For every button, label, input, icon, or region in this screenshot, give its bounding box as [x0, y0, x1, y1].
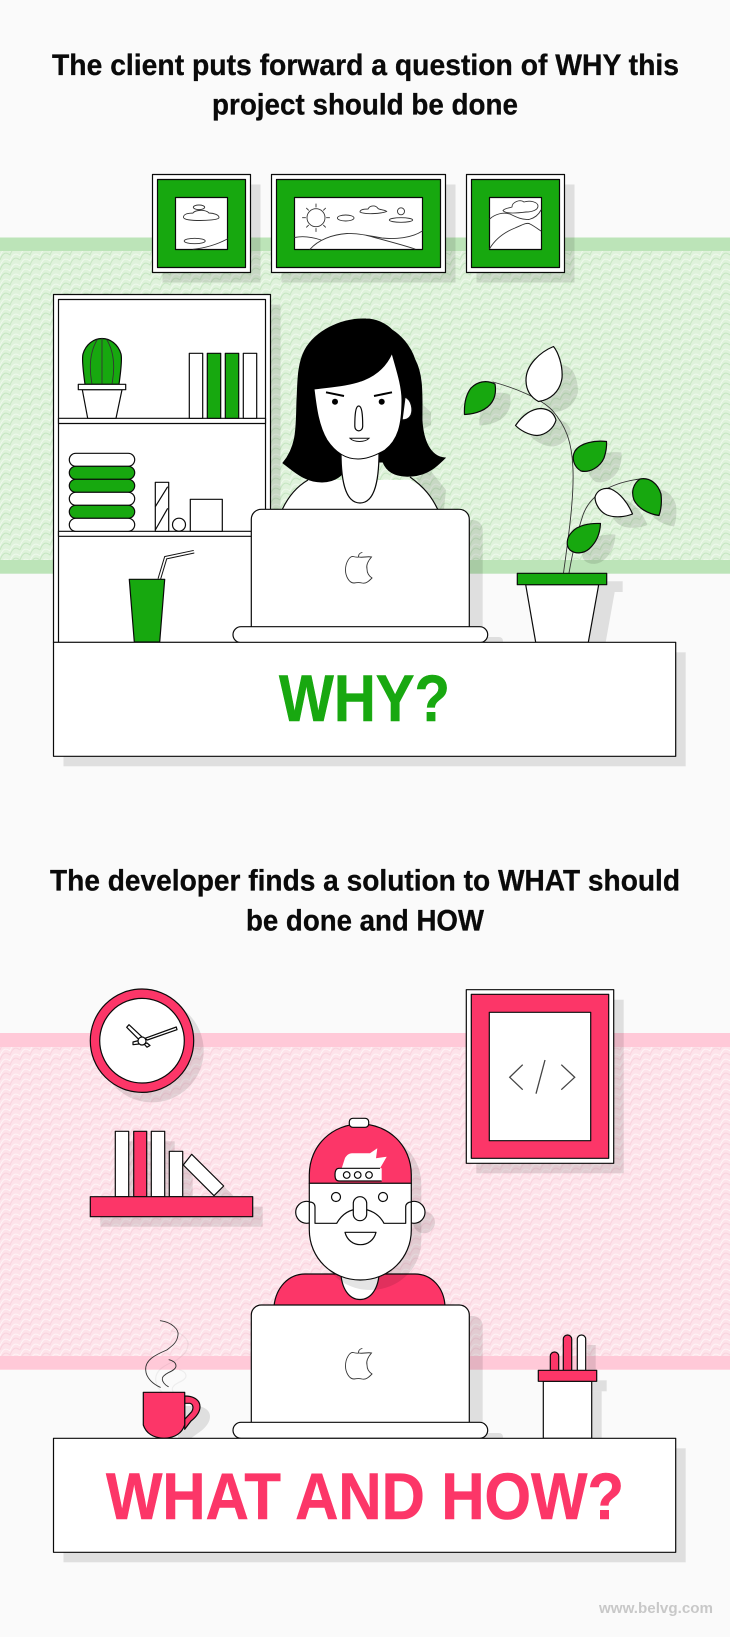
- steam: [146, 1321, 178, 1387]
- mug shadow: [178, 1406, 210, 1439]
- cap button: [349, 1118, 369, 1127]
- shoulder lines: [282, 477, 438, 510]
- icon: apple logo: [346, 1348, 372, 1379]
- laptop base: [233, 627, 488, 643]
- pot rim: [517, 573, 607, 585]
- heading: developer solution: [50, 865, 680, 937]
- face: [309, 1183, 411, 1280]
- label: WHAT AND HOW?: WHAT AND HOW?: [106, 1459, 624, 1533]
- heading: client question: project should be done: [212, 88, 518, 122]
- picture frame: clouds: [152, 174, 260, 282]
- stems: [493, 382, 573, 573]
- cap hair emblem: [335, 1148, 387, 1181]
- woman: [282, 319, 446, 510]
- torso: [282, 480, 438, 510]
- hair: [283, 319, 445, 482]
- mouth: [345, 1232, 376, 1245]
- ears: [296, 1201, 318, 1223]
- wall clock: [90, 989, 204, 1102]
- pencil cup: [538, 1335, 607, 1438]
- desk with WHAT AND HOW label: [54, 1438, 686, 1562]
- wall shelf with books: [90, 1131, 263, 1227]
- neck: [341, 1270, 379, 1300]
- potted plant: [464, 346, 676, 650]
- books upright: [189, 353, 257, 418]
- plant shadows: [479, 362, 676, 650]
- picture frame: sun and hills: [272, 174, 456, 282]
- code icon: [510, 1060, 575, 1094]
- heading: client question: The client puts forward a question of WHY this: [52, 49, 679, 82]
- bookshelf: [54, 294, 280, 644]
- cup body: [543, 1381, 592, 1438]
- developer: [274, 1118, 445, 1306]
- hair shadow: [416, 405, 446, 509]
- neck: [341, 452, 379, 503]
- laptop base: [233, 1422, 488, 1438]
- shoulders: [274, 1274, 445, 1306]
- mug handle: [185, 1396, 200, 1429]
- wall: pink patterned wall with bands: [0, 1033, 730, 1370]
- picture frame: code symbol: [466, 990, 624, 1173]
- eyes: [332, 1192, 388, 1202]
- nose: [353, 1197, 367, 1221]
- pencils: [550, 1352, 559, 1371]
- glass with straw: [129, 552, 194, 642]
- heading: client question: [52, 49, 679, 122]
- leaves: [464, 346, 661, 553]
- icon: apple logo: [346, 552, 372, 583]
- label: WHY?: WHY?: [279, 661, 450, 735]
- face: [314, 353, 402, 459]
- head shadow: [319, 1134, 435, 1290]
- desk with WHY label: [54, 642, 686, 766]
- nose: [355, 406, 363, 431]
- eyebrows and eyes: [326, 392, 392, 405]
- shelf ornaments: [155, 482, 222, 531]
- coffee mug with steam: [143, 1321, 210, 1439]
- stack of towels: [69, 453, 135, 531]
- mouth: [350, 438, 369, 441]
- laptop: client: [233, 509, 503, 645]
- wall: green patterned wall with bands: [0, 238, 730, 574]
- cup rim: [538, 1370, 597, 1381]
- ear: [402, 397, 412, 420]
- heading: developer solution: The developer finds a solution to WHAT should: [50, 865, 680, 898]
- steam shadow: [156, 1331, 188, 1397]
- mug body: [143, 1392, 185, 1438]
- flower pot: [526, 585, 599, 642]
- laptop: developer: [233, 1305, 503, 1441]
- beard outline: [309, 1202, 411, 1223]
- heading: developer solution: be done and HOW: [246, 904, 485, 937]
- icon: cactus in pot: [78, 338, 126, 418]
- picture frame: landscape: [466, 174, 574, 282]
- clock hands: [127, 1025, 177, 1047]
- cap: [309, 1124, 411, 1183]
- watermark: www.belvg.com: [598, 1600, 713, 1617]
